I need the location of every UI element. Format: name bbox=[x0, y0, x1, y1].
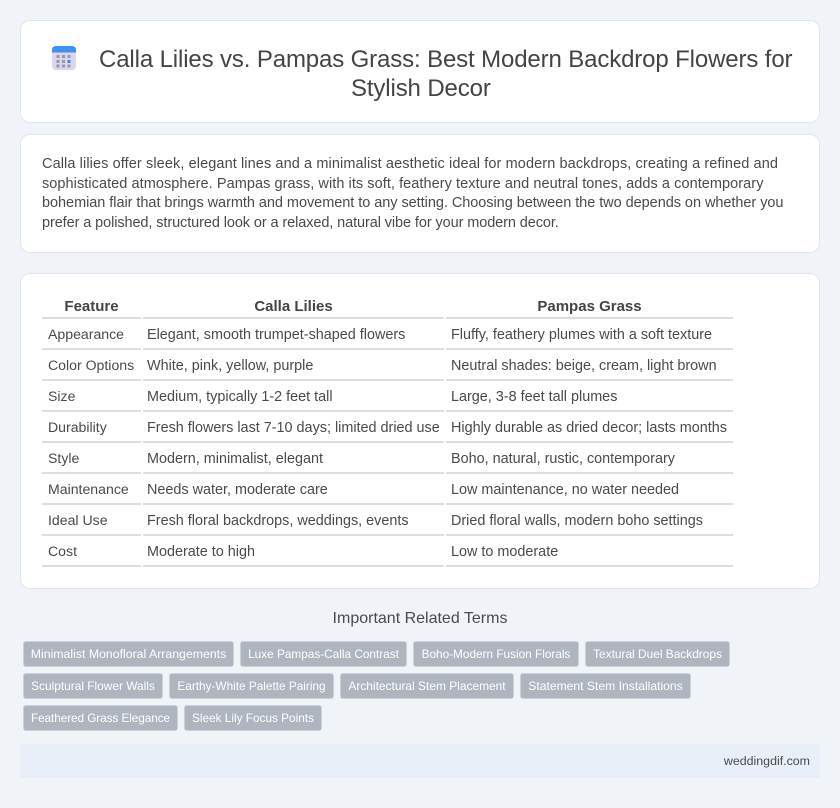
row: color options bbox=[48, 357, 717, 374]
row: durability: Durability bbox=[48, 419, 107, 435]
footer source: weddingdif.com bbox=[724, 754, 810, 768]
intro text: Calla lilies offer sleek, elegant lines and a minimalist aesthetic ideal for modern backdrops, creating a refined and bbox=[42, 156, 778, 172]
tag bbox=[169, 673, 334, 699]
table header bbox=[64, 298, 642, 315]
title: Stylish Decor bbox=[351, 75, 491, 102]
row: durability: Highly durable as dried decor; lasts months bbox=[451, 420, 727, 436]
intro text bbox=[42, 156, 783, 231]
tag: Boho-Modern Fusion Florals bbox=[422, 647, 570, 661]
tag bbox=[340, 673, 514, 699]
row: cost: Low to moderate bbox=[451, 544, 558, 560]
row: ideal use: Ideal Use bbox=[48, 512, 108, 528]
row: size bbox=[48, 388, 617, 405]
tag: Textural Duel Backdrops bbox=[593, 647, 722, 661]
title bbox=[99, 46, 792, 102]
row: color options: White, pink, yellow, purple bbox=[147, 358, 313, 374]
row: cost bbox=[48, 543, 558, 560]
tag bbox=[23, 673, 163, 699]
row: ideal use: Dried floral walls, modern boho settings bbox=[451, 513, 703, 529]
tag: Earthy-White Palette Pairing bbox=[177, 679, 326, 693]
tag bbox=[520, 673, 691, 699]
row: maintenance: Needs water, moderate care bbox=[147, 482, 328, 498]
tag bbox=[585, 641, 730, 667]
table header: Calla Lilies bbox=[254, 298, 333, 315]
related terms tags bbox=[23, 641, 730, 731]
tag bbox=[184, 705, 322, 731]
row: durability: Fresh flowers last 7-10 days; limited dried use bbox=[147, 420, 440, 436]
row: appearance bbox=[48, 326, 712, 343]
row: size: Size bbox=[48, 388, 75, 404]
row: cost: Moderate to high bbox=[147, 544, 255, 560]
row: cost: Cost bbox=[48, 543, 77, 559]
table bbox=[42, 298, 733, 567]
table header: Feature bbox=[64, 298, 119, 315]
tag: Architectural Stem Placement bbox=[348, 679, 506, 693]
tag: Sleek Lily Focus Points bbox=[192, 711, 314, 725]
intro panel bbox=[20, 134, 820, 253]
related terms heading: Important Related Terms bbox=[333, 610, 507, 627]
footer bar bbox=[20, 744, 820, 778]
table header: Pampas Grass bbox=[537, 298, 642, 315]
row: style: Style bbox=[48, 450, 79, 466]
table panel bbox=[20, 273, 820, 589]
intro text: prefer a polished, structured look or a relaxed, natural vibe for your modern decor. bbox=[42, 215, 559, 231]
title: Calla Lilies vs. Pampas Grass: Best Modern Backdrop Flowers for bbox=[99, 46, 792, 73]
row: maintenance bbox=[48, 481, 679, 498]
row: appearance: Fluffy, feathery plumes with a soft texture bbox=[451, 327, 712, 343]
tag bbox=[413, 641, 579, 667]
header panel bbox=[20, 20, 820, 123]
row: ideal use bbox=[48, 512, 703, 529]
row: appearance: Elegant, smooth trumpet-shaped flowers bbox=[147, 327, 405, 343]
intro text: bohemian flair that brings warmth and movement to any setting. Choosing between the two depends on whether you bbox=[42, 195, 783, 211]
row: ideal use: Fresh floral backdrops, weddings, events bbox=[147, 513, 409, 529]
tag: Luxe Pampas-Calla Contrast bbox=[248, 647, 399, 661]
tag: Minimalist Monofloral Arrangements bbox=[31, 647, 226, 661]
tag: Feathered Grass Elegance bbox=[31, 711, 170, 725]
intro text: sophisticated atmosphere. Pampas grass, with its soft, feathery texture and neutral tones, adds a contemporary bbox=[42, 176, 764, 192]
row: color options: Neutral shades: beige, cream, light brown bbox=[451, 358, 717, 374]
tag bbox=[23, 641, 234, 667]
tag: Statement Stem Installations bbox=[528, 679, 683, 693]
row: maintenance: Low maintenance, no water needed bbox=[451, 482, 679, 498]
tag: Sculptural Flower Walls bbox=[31, 679, 155, 693]
row: appearance: Appearance bbox=[48, 326, 124, 342]
tag bbox=[240, 641, 407, 667]
row: size: Medium, typically 1-2 feet tall bbox=[147, 389, 333, 405]
row: style: Modern, minimalist, elegant bbox=[147, 451, 323, 467]
row: style bbox=[48, 450, 675, 467]
row: color options: Color Options bbox=[48, 357, 134, 373]
row: maintenance: Maintenance bbox=[48, 481, 129, 497]
icon: calendar bbox=[52, 46, 76, 70]
row: size: Large, 3-8 feet tall plumes bbox=[451, 389, 617, 405]
row: durability bbox=[48, 419, 727, 436]
tag bbox=[23, 705, 178, 731]
row: style: Boho, natural, rustic, contemporary bbox=[451, 451, 675, 467]
